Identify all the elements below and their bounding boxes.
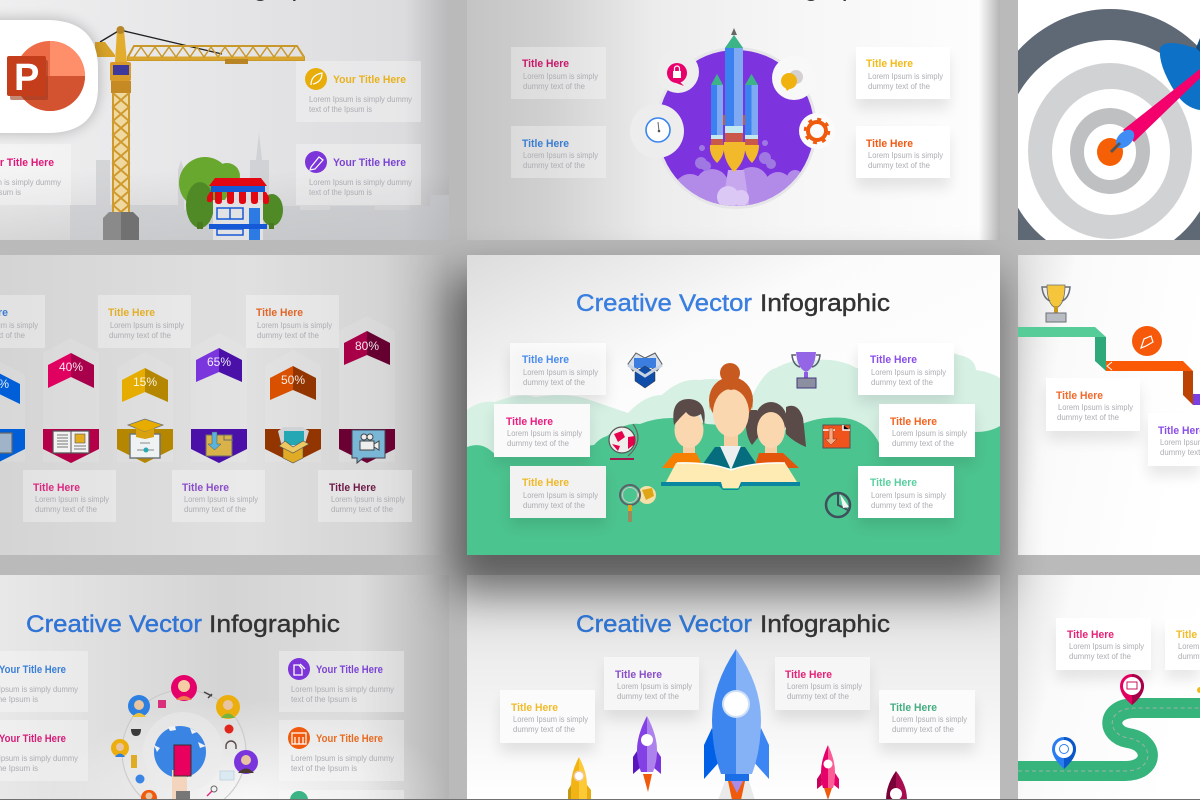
dart xyxy=(1111,38,1200,152)
card: title yellow: Title Here xyxy=(511,702,558,714)
icon: magnifier and world xyxy=(620,485,656,522)
card: your title orange: Your Title Here xyxy=(316,733,383,745)
column 50%: 50% xyxy=(281,373,305,387)
card: title purple xyxy=(604,657,699,710)
card: title orange xyxy=(1046,378,1140,431)
column 50% xyxy=(265,366,321,463)
pink rocket xyxy=(817,745,839,800)
card: your title pink: Your Title Here xyxy=(0,733,66,745)
card: title purple xyxy=(1148,413,1200,466)
orange ribbon xyxy=(1106,361,1200,405)
heading: Infographic xyxy=(760,290,890,317)
card: title yellow: dummy text of the xyxy=(868,82,931,91)
card: title blue xyxy=(0,295,45,348)
panel: rocket in circle slide xyxy=(511,0,950,210)
card: title orange xyxy=(246,295,339,348)
panel: percent hexagons slide xyxy=(0,295,412,522)
card: your title pink xyxy=(0,720,88,781)
heading: Infographic xyxy=(209,611,340,638)
card: title gold: Title Here xyxy=(108,307,155,319)
target rings xyxy=(1018,9,1200,240)
card: title yellow: Lorem Ipsum is simply xyxy=(868,72,943,81)
icon: lock bubble xyxy=(667,63,687,86)
card: title orange: Lorem Ipsum is simply xyxy=(892,429,967,438)
orbit and globe xyxy=(122,690,246,800)
card: title green: Lorem Ipsum is simply xyxy=(871,491,946,500)
card shadows xyxy=(494,351,975,526)
card: title blue: Lorem Ipsum is simply xyxy=(523,151,598,160)
card: title pink xyxy=(775,657,870,710)
card: title orange: Title Here xyxy=(890,416,937,428)
card: your title blue: Your Title Here xyxy=(0,664,66,676)
big blue rocket xyxy=(704,649,769,800)
icon: trophy xyxy=(792,352,820,388)
girl xyxy=(746,402,806,468)
boy xyxy=(662,399,705,468)
open book xyxy=(666,463,797,488)
card: title orange: Title Here xyxy=(1056,390,1103,402)
green ribbon xyxy=(1018,327,1106,371)
heading: Creative Vector xyxy=(576,290,752,317)
card: partial green xyxy=(279,790,404,800)
card: title pink: Lorem Ipsum is simply xyxy=(1069,642,1144,651)
card: title pink: dummy text of the xyxy=(1069,652,1132,661)
panel: dart target xyxy=(1018,9,1200,240)
card: title orange: dummy text of the xyxy=(1057,413,1120,422)
dark green hills xyxy=(467,418,1000,555)
card: your title orange: text of the Ipsum is xyxy=(291,764,357,773)
icon: open book xyxy=(53,431,89,453)
card: title purple: Lorem Ipsum is simply xyxy=(871,368,946,377)
soft shadows under cards xyxy=(500,57,1200,753)
pin: yellow partial xyxy=(1197,687,1200,693)
woman xyxy=(704,363,756,470)
panel: centre education slide xyxy=(467,255,1000,555)
icon: speech bubbles xyxy=(781,70,803,91)
card: title yellow: Title Here xyxy=(522,477,569,489)
card: title green: Title Here xyxy=(870,477,917,489)
card: title pink: Title Here xyxy=(506,416,553,428)
card: title yellow: dummy text of the xyxy=(513,725,576,734)
icon: graduation cap diploma xyxy=(128,419,163,458)
heading: Creative Vector xyxy=(26,611,202,638)
icon: box xyxy=(628,353,662,388)
card: title pink: Lorem Ipsum is simply xyxy=(35,495,109,504)
column 15% xyxy=(117,368,173,463)
card: title purple xyxy=(172,470,265,522)
shadow of centre panel xyxy=(450,275,998,592)
light green hills xyxy=(467,354,1000,453)
card: title purple: dummy text of the xyxy=(871,378,934,387)
column 65% xyxy=(191,348,247,463)
card: title pink: dummy text of the xyxy=(35,505,98,514)
icon: globe xyxy=(609,424,638,459)
card: your title yellow: text of the Ipsum is xyxy=(309,105,372,114)
card: title maroon: Lorem Ipsum is simply xyxy=(331,495,405,504)
card: title purple: Title Here xyxy=(870,354,917,366)
card: title pink xyxy=(1056,618,1151,670)
PowerPoint logo xyxy=(0,20,98,133)
card: title blue xyxy=(510,343,606,395)
card: title yellow: dummy text of the xyxy=(523,501,586,510)
card: title orange: Title Here xyxy=(256,307,303,319)
card: title yellow: Lorem Ipsum is simply xyxy=(523,491,598,500)
card: your title yellow: Lorem Ipsum is simply dummy xyxy=(309,95,412,104)
card: title yellow xyxy=(1165,618,1200,670)
purple rocket xyxy=(633,716,661,792)
column 65%: 65% xyxy=(207,355,231,369)
card: title pink xyxy=(511,47,606,99)
card: title orange: Lorem Ipsum is simply xyxy=(257,321,332,330)
crane xyxy=(95,26,304,240)
card: title orange xyxy=(856,126,950,178)
card: title pink: Title Here xyxy=(785,669,832,681)
card: your title purple xyxy=(279,651,404,712)
card: title green: dummy text of the xyxy=(871,501,934,510)
pin: pink chat xyxy=(1120,674,1144,705)
heading: Creative Vector xyxy=(576,611,752,638)
card: title orange: dummy text of the xyxy=(257,331,320,340)
icon: pen circle xyxy=(1132,326,1162,356)
card: title yellow xyxy=(500,690,595,743)
card: title orange: Title Here xyxy=(866,138,913,150)
icon: video camera bubble xyxy=(352,430,385,463)
maroon rocket xyxy=(886,771,907,800)
card: your title purple: text of the Ipsum is xyxy=(309,188,372,197)
column 15%: 15% xyxy=(133,375,157,389)
icon: folder xyxy=(823,425,850,448)
card: title blue: Title Here xyxy=(522,354,569,366)
card: title orange: Lorem Ipsum is simply xyxy=(1058,403,1133,412)
heading xyxy=(576,611,890,638)
column pale backgrounds xyxy=(0,316,395,462)
card: title purple xyxy=(858,343,954,395)
card: title purple: dummy text of the xyxy=(184,505,247,514)
heading: Infographic xyxy=(760,611,890,638)
user avatars xyxy=(111,675,258,800)
card: title maroon: dummy text of the xyxy=(331,505,394,514)
column 80% xyxy=(339,331,395,463)
card: your title blue xyxy=(0,651,88,712)
card: title pink xyxy=(23,470,116,522)
card: title gold xyxy=(98,295,191,348)
card: title blue xyxy=(511,126,606,178)
card: title pink: Title Here xyxy=(1067,629,1114,641)
teacher and children with book xyxy=(661,363,806,490)
card: title purple: Lorem Ipsum is simply xyxy=(617,682,692,691)
card: title pink: dummy text of the xyxy=(523,82,586,91)
card: your title pink xyxy=(0,144,71,205)
card: your title orange xyxy=(279,720,404,781)
panel: construction crane slide xyxy=(0,0,449,240)
card: title orange: dummy text of the xyxy=(868,161,931,170)
card: title gold: Lorem Ipsum is simply xyxy=(110,321,184,330)
card: title green xyxy=(858,466,954,518)
icon: gear xyxy=(805,119,829,143)
pin: blue chat xyxy=(1052,737,1076,769)
card: title yellow xyxy=(856,47,950,99)
card: your title orange: Lorem Ipsum is simply dummy xyxy=(291,754,394,763)
card: title orange xyxy=(879,404,975,457)
purple badge with rocket xyxy=(662,28,816,209)
card: title green: Title Here xyxy=(890,702,937,714)
card: title yellow xyxy=(510,466,606,518)
heading xyxy=(26,611,340,638)
city skyline xyxy=(70,133,449,240)
icon: folder download xyxy=(206,432,233,456)
card: title gold: dummy text of the xyxy=(109,331,172,340)
panel: rockets slide xyxy=(500,611,975,800)
small icons around orbit xyxy=(131,692,236,796)
column 40%: 40% xyxy=(59,360,83,374)
icon: pie chart xyxy=(826,493,850,517)
card: title pink: Title Here xyxy=(33,482,80,494)
card: your title yellow xyxy=(296,61,421,122)
card: title purple: Lorem Ipsum is simply xyxy=(184,495,258,504)
icon: clock xyxy=(646,118,670,142)
heading xyxy=(577,293,890,316)
PowerPoint logo: P xyxy=(14,57,39,99)
card: your title purple: Lorem Ipsum is simply dummy xyxy=(309,178,412,187)
card: your title purple: Lorem Ipsum is simply dummy xyxy=(291,685,394,694)
card: your title yellow: Your Title Here xyxy=(333,74,406,86)
column 80%: 80% xyxy=(355,339,379,353)
card: title purple: Title Here xyxy=(182,482,229,494)
shop with trees xyxy=(179,157,283,240)
icon: open box xyxy=(278,427,309,463)
card: title maroon: Title Here xyxy=(329,482,376,494)
card: title green: Lorem Ipsum is simply xyxy=(892,715,967,724)
panel: winding road slide xyxy=(1018,618,1200,771)
card: title orange: Lorem Ipsum is simply xyxy=(868,151,943,160)
card: title purple: dummy text of the xyxy=(617,692,680,701)
card: title blue: dummy text of the xyxy=(523,161,586,170)
card: your title purple: Your Title Here xyxy=(333,157,406,169)
gold rocket xyxy=(568,757,591,800)
card: title orange: dummy text of the xyxy=(892,439,955,448)
card: title yellow: Lorem Ipsum is simply xyxy=(513,715,588,724)
column blue xyxy=(0,372,25,463)
card: title purple: Title Here xyxy=(615,669,662,681)
panel: connected world slide xyxy=(0,611,404,800)
panel: timeline ribbon slide xyxy=(1018,285,1200,466)
card: title blue: dummy text of the xyxy=(523,378,586,387)
card: title pink: dummy text of the xyxy=(507,439,570,448)
card: title pink: Lorem Ipsum is simply xyxy=(523,72,598,81)
card: title maroon xyxy=(318,470,412,522)
card: title pink xyxy=(494,404,590,457)
column 40% xyxy=(43,353,99,463)
card: your title purple: Your Title Here xyxy=(316,664,383,676)
card: title blue: Lorem Ipsum is simply xyxy=(523,368,598,377)
card: title pink: dummy text of the xyxy=(787,692,850,701)
green road xyxy=(1018,708,1200,771)
card: title pink: Title Here xyxy=(522,58,569,70)
card: title blue: Title Here xyxy=(522,138,569,150)
card: title pink: Lorem Ipsum is simply xyxy=(787,682,862,691)
card: title green: dummy text of the xyxy=(892,725,955,734)
card: title yellow: Title Here xyxy=(866,58,913,70)
card: your title purple xyxy=(296,144,421,205)
icon: trophy xyxy=(1042,285,1070,322)
card: title green xyxy=(879,690,975,743)
card: your title purple: text of the Ipsum is xyxy=(291,695,357,704)
card: title pink: Lorem Ipsum is simply xyxy=(507,429,582,438)
